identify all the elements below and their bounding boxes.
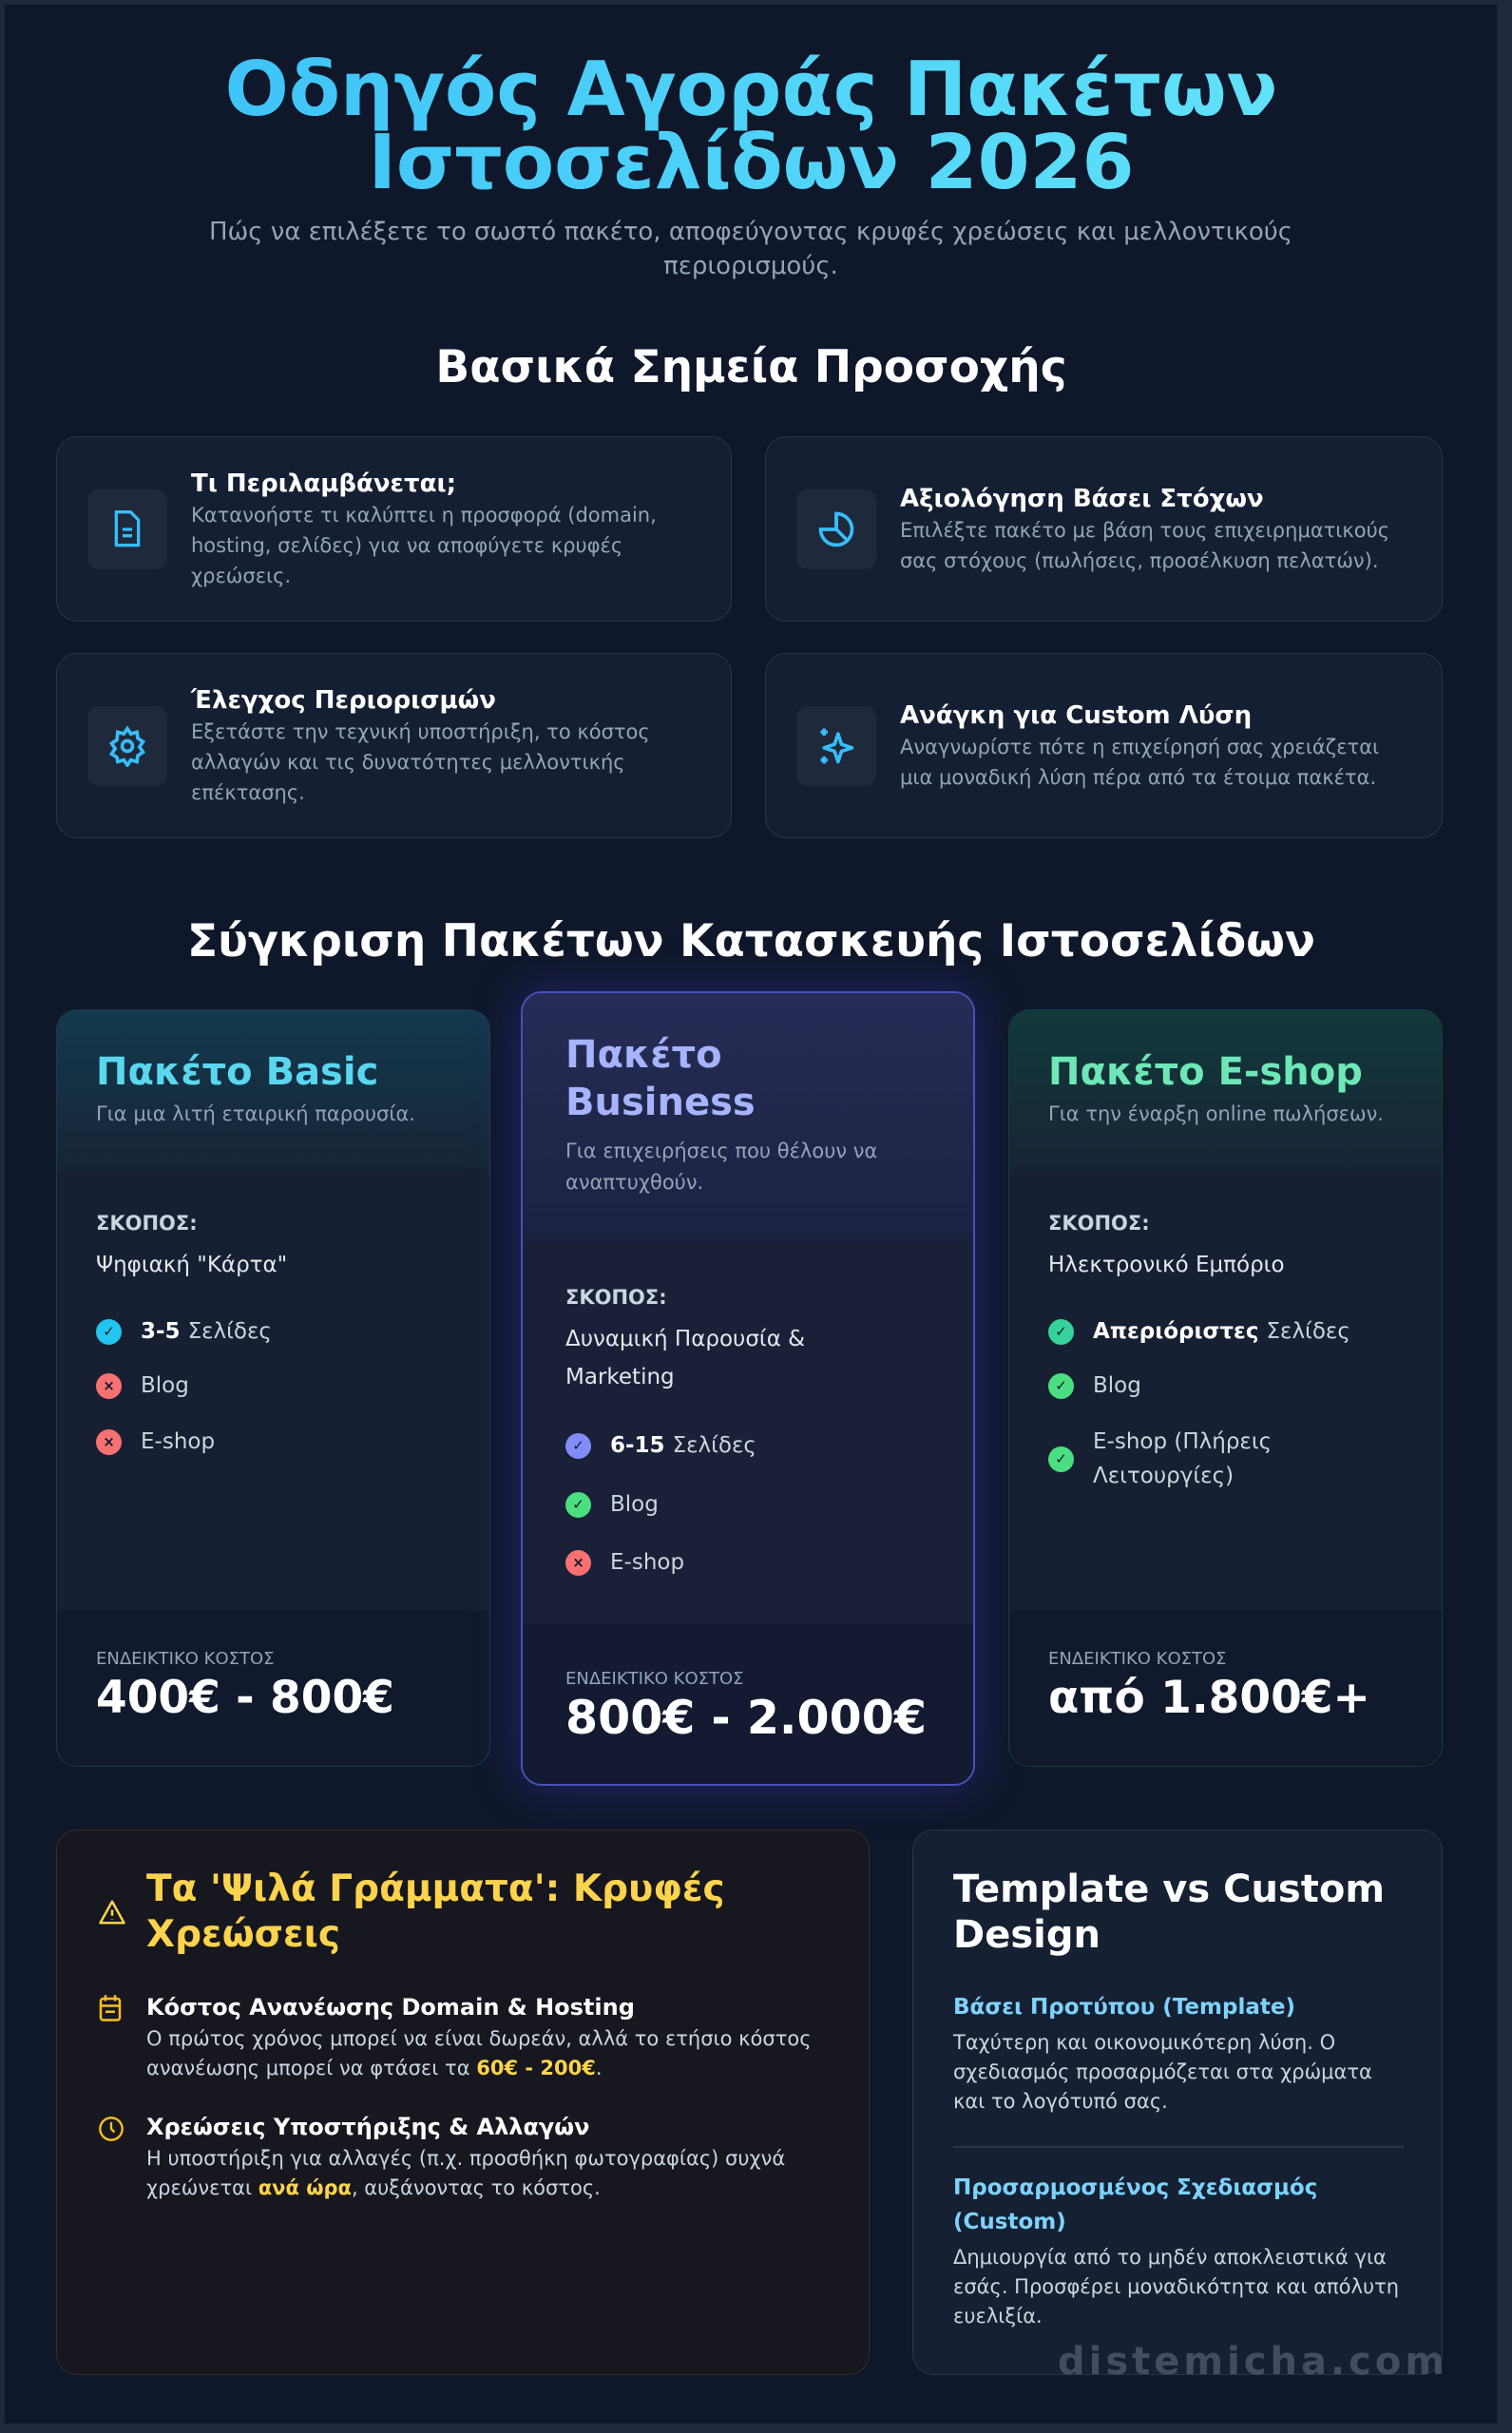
features: 3-5 xyxy=(141,1319,181,1344)
features: ✓ xyxy=(103,1323,115,1340)
header: Για μια λιτή εταιρική παρουσία. xyxy=(96,1102,415,1125)
block: custom: (Custom) xyxy=(953,2210,1066,2234)
heading: Χρεώσεις xyxy=(146,1913,340,1956)
text: Αξιολόγηση Βάσει Στόχων xyxy=(900,485,1264,513)
features: ✓ xyxy=(572,1437,584,1454)
purpose xyxy=(96,1212,287,1277)
features: Απεριόριστες xyxy=(1093,1319,1258,1344)
card: custom solution xyxy=(765,653,1443,838)
header: Πακέτο xyxy=(565,1033,722,1077)
purpose: ΣΚΟΠΟΣ: xyxy=(565,1286,667,1309)
package: business: Blog xyxy=(610,1492,659,1517)
block: custom: Προσαρμοσμένος Σχεδιασμός xyxy=(953,2175,1317,2200)
panel: template vs custom xyxy=(912,1830,1443,2375)
item: renewal: Κόστος Ανανέωσης Domain & Hosting xyxy=(146,1994,635,2021)
heading: Template vs Custom xyxy=(953,1868,1385,1911)
header xyxy=(523,993,973,1242)
price footer: ΕΝΔΕΙΚΤΙΚΟ ΚΟΣΤΟΣ xyxy=(96,1649,275,1669)
price footer: 400€ - 800€ xyxy=(96,1672,394,1724)
package: basic: E-shop xyxy=(141,1429,215,1454)
price footer: ΕΝΔΕΙΚΤΙΚΟ ΚΟΣΤΟΣ xyxy=(565,1669,744,1689)
heading: comparison: Σύγκριση Πακέτων Κατασκευής Ιστοσελίδων xyxy=(187,915,1315,967)
block: custom xyxy=(953,2175,1399,2328)
package: eshop xyxy=(1008,1009,1443,1767)
features: Σελίδες xyxy=(673,1433,756,1458)
item: support: Χρεώσεις Υποστήριξης & Αλλαγών xyxy=(146,2114,589,2140)
package: business: × xyxy=(572,1554,584,1571)
text: Επιλέξτε πακέτο με βάση τους επιχειρηματικούς σας στόχους (πωλήσεις, προσέλκυση πελατών). xyxy=(900,519,1389,572)
package: eshop: Λειτουργίες) xyxy=(1093,1464,1234,1488)
block: custom: Δημιουργία από το μηδέν αποκλειστικά για εσάς. Προσφέρει μοναδικότητα και απόλυτη ευελιξία. xyxy=(953,2246,1399,2328)
price footer: από 1.800€+ xyxy=(1048,1672,1370,1724)
block: template: Ταχύτερη και οικονομικότερη λύση. Ο σχεδιασμός προσαρμόζεται στα χρώματα και το λογότυπό σας. xyxy=(953,2031,1372,2113)
package: eshop: ✓ xyxy=(1055,1450,1067,1467)
purpose: ΣΚΟΠΟΣ: xyxy=(1048,1212,1150,1235)
package: basic: × xyxy=(103,1433,115,1450)
purpose xyxy=(1048,1212,1285,1277)
features: Σελίδες xyxy=(188,1319,272,1344)
purpose xyxy=(565,1286,805,1389)
package: eshop: E-shop (Πλήρεις xyxy=(1093,1429,1272,1454)
features xyxy=(1048,1319,1350,1345)
package: business xyxy=(521,991,975,1786)
header: Για επιχειρήσεις που θέλουν να αναπτυχθούν. xyxy=(565,1140,877,1194)
package: basic: Blog xyxy=(141,1373,189,1398)
heading: Τα 'Ψιλά Γράμματα': Κρυφές xyxy=(146,1868,725,1910)
purpose: Ηλεκτρονικό Εμπόριο xyxy=(1048,1253,1285,1277)
header: Για την έναρξη online πωλήσεων. xyxy=(1048,1102,1384,1125)
card: what is included xyxy=(56,436,732,622)
heading: Design xyxy=(953,1913,1101,1957)
price footer xyxy=(523,1624,973,1784)
text: Έλεγχος Περιορισμών xyxy=(191,686,496,715)
header: Πακέτο E-shop xyxy=(1048,1050,1363,1094)
panel: hidden fees xyxy=(56,1830,870,2375)
title: Ιστοσελίδων 2026 xyxy=(368,119,1135,206)
features: ✓ xyxy=(1055,1323,1067,1340)
watermark: distemicha.com xyxy=(1058,2340,1448,2384)
icon: document xyxy=(87,489,167,568)
header xyxy=(57,1010,489,1170)
item: renewal: Ο πρώτος χρόνος μπορεί να είναι δωρεάν, αλλά το ετήσιο κόστος ανανέωσης μπορεί να φτάσει τα 60€ - 200€. xyxy=(146,2027,812,2079)
text: Τι Περιλαμβάνεται; xyxy=(191,469,456,498)
heading: key points: Βασικά Σημεία Προσοχής xyxy=(435,341,1067,393)
text xyxy=(900,701,1379,789)
item: renewal xyxy=(99,1994,812,2079)
package: basic: × xyxy=(103,1377,115,1394)
heading xyxy=(953,1868,1385,1957)
header: Πακέτο Basic xyxy=(96,1050,378,1094)
text: Κατανοήστε τι καλύπτει η προσφορά (domain, hosting, σελίδες) για να αποφύγετε κρυφές χρεώσεις. xyxy=(191,504,657,587)
title: Οδηγός Αγοράς Πακέτων xyxy=(225,46,1277,133)
block: template: Βάσει Προτύπου (Template) xyxy=(953,1995,1295,2020)
icon: pie chart xyxy=(796,489,876,568)
package: business: ✓ xyxy=(572,1496,584,1513)
text: Εξετάστε την τεχνική υποστήριξη, το κόστος αλλαγών και τις δυνατότητες μελλοντικής επέκτασης. xyxy=(191,720,650,804)
text: Ανάγκη για Custom Λύση xyxy=(900,701,1252,730)
price footer: 800€ - 2.000€ xyxy=(565,1691,927,1745)
features xyxy=(565,1433,756,1459)
header xyxy=(1009,1010,1442,1170)
subtitle: Πώς να επιλέξετε το σωστό πακέτο, αποφεύγοντας κρυφές χρεώσεις και μελλοντικούς περιορισμούς. xyxy=(209,218,1292,280)
icon: sparkles xyxy=(796,705,876,785)
package: eshop: Blog xyxy=(1093,1373,1141,1398)
features: Σελίδες xyxy=(1266,1319,1350,1344)
purpose: Δυναμική Παρουσία & xyxy=(565,1327,805,1351)
block: template xyxy=(952,1995,1372,2113)
icon: gear xyxy=(87,705,167,785)
purpose: Ψηφιακή "Κάρτα" xyxy=(96,1253,287,1277)
text: Αναγνωρίστε πότε η επιχείρησή σας χρειάζεται μια μοναδική λύση πέρα από τα έτοιμα πακέτα. xyxy=(900,736,1379,789)
price footer xyxy=(57,1611,489,1766)
package: eshop: ✓ xyxy=(1055,1377,1067,1394)
package: business: E-shop xyxy=(610,1550,684,1575)
item: support: Η υποστήριξη για αλλαγές (π.χ. προσθήκη φωτογραφίας) συχνά χρεώνεται ανά ώρα, αυξάνοντας το κόστος. xyxy=(146,2147,785,2199)
card: goals xyxy=(765,436,1443,622)
features: 6-15 xyxy=(610,1433,665,1458)
purpose: Marketing xyxy=(565,1365,675,1389)
icon: warning xyxy=(99,1901,125,1924)
title xyxy=(0,53,1502,200)
item: support xyxy=(99,2114,785,2199)
features xyxy=(96,1319,272,1345)
purpose: ΣΚΟΠΟΣ: xyxy=(96,1212,198,1235)
heading xyxy=(146,1868,725,1956)
card: limitations xyxy=(56,653,732,838)
header: Business xyxy=(565,1081,756,1124)
price footer: ΕΝΔΕΙΚΤΙΚΟ ΚΟΣΤΟΣ xyxy=(1048,1649,1227,1669)
text xyxy=(900,485,1389,572)
package: basic xyxy=(56,1009,490,1767)
price footer xyxy=(1009,1611,1442,1766)
